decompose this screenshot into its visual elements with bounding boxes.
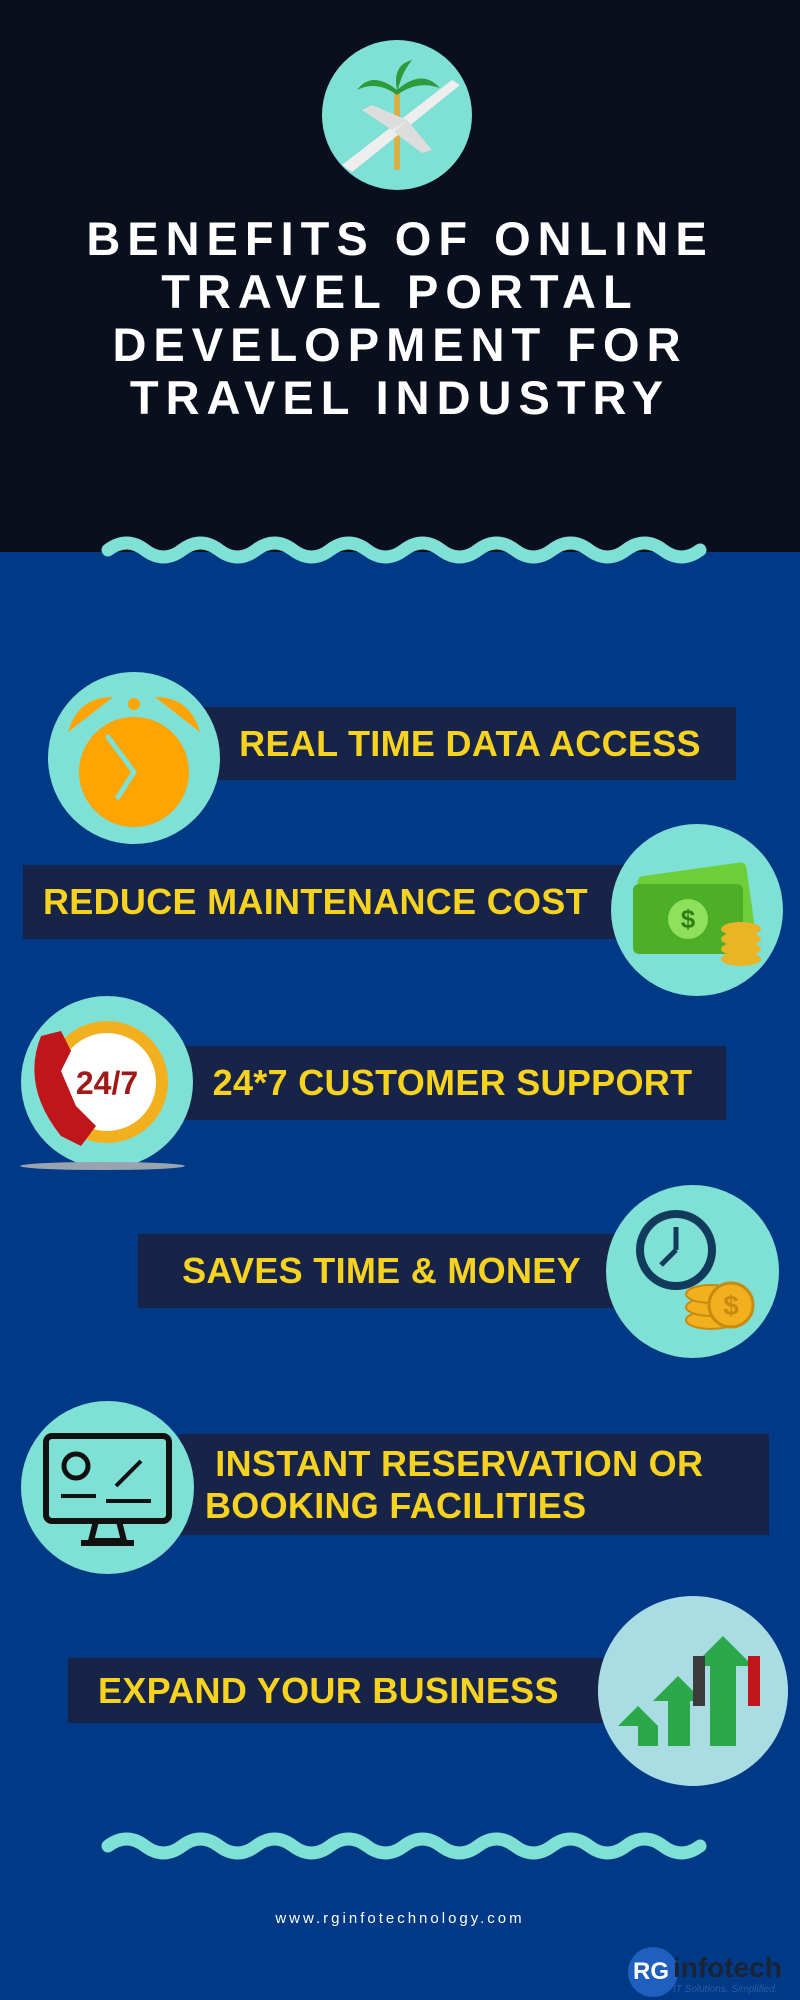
row 5 bar: INSTANT RESERVATION OR [215,1442,703,1484]
icon: 24/7 phone [21,996,193,1168]
logo: RG [633,1958,669,1985]
icon: money [611,824,783,996]
website url: www.rginfotechnology.com [275,1910,525,1927]
icon: money: $ [681,904,696,934]
row 1 bar: REAL TIME DATA ACCESS [239,722,701,764]
row 5 bar: BOOKING FACILITIES [205,1484,586,1526]
shadow [20,1162,185,1170]
title: TRAVEL INDUSTRY [130,371,670,424]
row 3 bar: 24*7 CUSTOMER SUPPORT [213,1062,692,1103]
row 2 bar [23,865,625,939]
title: TRAVEL PORTAL [161,265,639,318]
row 6 bar [68,1658,612,1723]
row 5 bar [179,1434,769,1535]
row 1 bar [204,707,736,780]
row 6 bar: EXPAND YOUR BUSINESS [98,1670,559,1710]
row 4 bar [138,1234,625,1308]
logo: infotech [673,1952,782,1983]
icon: monitor [21,1401,194,1574]
wave top [102,536,706,564]
title [86,212,714,424]
icon: 24/7 phone: 24/7 [76,1065,138,1101]
row 2 bar: REDUCE MAINTENANCE COST [43,881,588,922]
icon: growth arrows [598,1596,788,1786]
header background [0,0,800,552]
icon: alarm clock [48,672,220,844]
logo [628,1947,782,1997]
wave bottom [102,1832,706,1860]
logo: IT Solutions. Simplified. [673,1984,778,1995]
icon: airplane and palm [322,40,472,190]
title: BENEFITS OF ONLINE [86,212,714,265]
title: DEVELOPMENT FOR [112,318,688,371]
row 3 bar [179,1046,726,1120]
icon: clock and coins [606,1185,779,1358]
row 4 bar: SAVES TIME & MONEY [182,1250,581,1291]
icon: clock and coins: $ [723,1290,739,1321]
